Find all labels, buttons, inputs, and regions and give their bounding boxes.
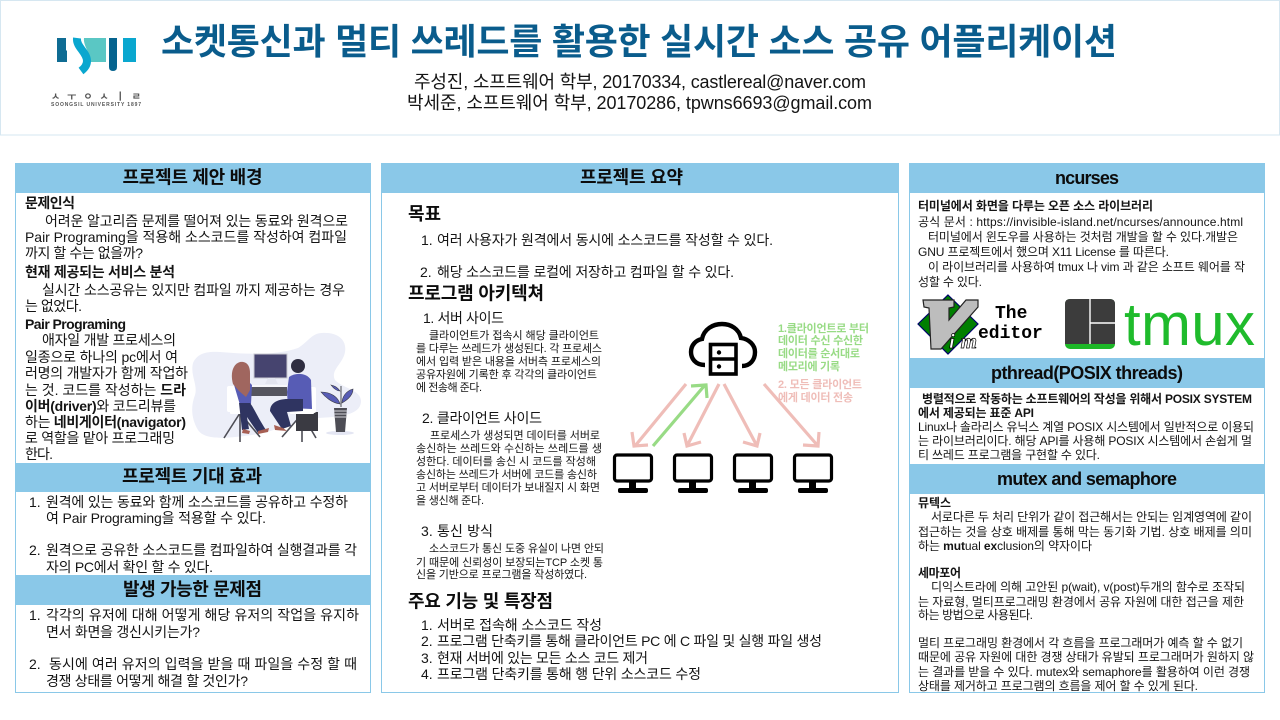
text block: possible problems: 면서 화면을 갱신시키는가? [46, 624, 200, 640]
section: program architecture [408, 284, 604, 581]
section: program architecture: 기 때문에 신뢰성이 보장되는TCP 소켓 통 [416, 556, 603, 569]
section: program architecture: 신을 기반으로 프로그램을 작성하였다. [416, 567, 587, 581]
text block: background: 어려운 알고리즘 문제를 떨어져 있는 동료와 원격으로 [45, 213, 348, 229]
section: key features [408, 592, 822, 682]
text block: semaphore: 는 자료형, 멀티프로그래밍 환경에서 공유 자원에 대한 접근을 제한 [918, 595, 1244, 609]
logo: vim: The [995, 304, 1027, 324]
section: goals: 여러 사용자가 원격에서 동시에 소스코드를 작성할 수 있다. [437, 232, 773, 248]
panel: right column [909, 163, 1265, 693]
heading: 프로젝트 제안 배경 [15, 163, 371, 193]
diagram: server and clients [614, 322, 869, 493]
text block: expected effects: 여 Pair Programing을 적용할 수 있다. [46, 510, 266, 526]
text block: semaphore: 멀티 프로그래밍 환경에서 각 흐름을 프로그래머가 예측 할 수 없기 [918, 636, 1243, 650]
logo: vim: editor [978, 324, 1043, 344]
logo: tmux: tmux [1124, 291, 1255, 358]
section: program architecture: 프로그램 아키텍쳐 [408, 284, 544, 304]
text block: possible problems: 각각의 유저에 대해 어떻게 해당 유저의 작업을 유지하 [46, 607, 359, 623]
illustration: pair programming [192, 333, 361, 442]
heading: mutex and semaphore [909, 464, 1265, 494]
callout: receive step: 메모리에 기록 [778, 359, 840, 373]
text block: ncurses: 터미널에서 화면을 다루는 오픈 소스 라이브러리 [918, 198, 1153, 213]
text block: background: 는 없었다. [25, 298, 82, 314]
callout: receive step: 데이터 수신 수신한 [778, 333, 863, 347]
icons: client monitors [614, 455, 832, 493]
section: key features: 주요 기능 및 특장점 [408, 592, 553, 612]
section: program architecture: 송신하는 쓰레드가 서버에 코드를 송신하 [416, 467, 597, 481]
text block: ncurses: 성할 수 있다. [918, 275, 982, 289]
heading: 프로젝트 기대 효과 [15, 463, 371, 492]
section: key features: 3. [421, 650, 433, 666]
text block: background: 까지 할 수는 없을까? [25, 245, 143, 261]
text block: background [25, 195, 348, 462]
heading: 프로젝트 요약 [381, 163, 899, 193]
section: program architecture: 1. 서버 사이드 [423, 310, 504, 326]
panel: project summary [381, 163, 899, 692]
text block: background: 하는 네비게이터(navigator) [25, 414, 186, 430]
text block: ncurses: 터미널에서 윈도우를 사용하는 것처럼 개발을 할 수 있다.개발은 [928, 230, 1238, 244]
text block: mutex: 하는 mutual exclusion의 약자이다 [918, 538, 1092, 553]
panel: left column [15, 163, 371, 692]
text block: semaphore: 세마포어 [918, 566, 961, 580]
logo: vim [918, 295, 1043, 354]
text block: pthread: 에서 제공되는 표준 API [918, 405, 1034, 420]
heading: 프로젝트 기대 효과: 프로젝트 기대 효과 [122, 466, 262, 486]
callout: send step: 2. 모든 클라이언트 [778, 378, 862, 391]
text block: semaphore: 는 결과를 받을 수 있다. mutex와 semaphore를 활용하여 이런 경쟁 [918, 665, 1250, 679]
section: goals: 목표 [408, 204, 441, 224]
text block: pthread: 병렬적으로 작동하는 소프트웨어의 작성을 위해서 POSIX SYSTEM [922, 392, 1252, 406]
text block: expected effects [29, 494, 357, 575]
section: goals [408, 204, 773, 280]
text block: semaphore: 디익스트라에 의해 고안된 p(wait), v(post)두개의 함수로 조작되 [931, 580, 1245, 594]
section: program architecture: 프로세스가 생성되면 데이터를 서버로 [430, 429, 600, 442]
text block: semaphore: 하는 방법으로 사용된다. [918, 608, 1033, 622]
heading: 프로젝트 제안 배경: 프로젝트 제안 배경 [122, 168, 262, 188]
arrows: data flow [632, 384, 819, 446]
text block: background: Pair Programing [25, 316, 126, 332]
callout: send step: 에게 데이터 전송 [778, 390, 853, 404]
text block: background: Pair Programing을 적용해 소스코드를 작성하여 컴파일 [25, 229, 347, 245]
text block: possible problems: 경쟁 상태를 어떻게 해결 할 것인가? [46, 673, 248, 689]
text block: ncurses: 이 라이브러리를 사용하여 tmux 나 vim 과 같은 소프트 웨어를 작 [928, 260, 1245, 274]
text block: background: 실시간 소스공유는 있지만 컴파일 까지 제공하는 경우 [42, 282, 345, 298]
text block: pthread: 는 라이브러리이다. 해당 API를 사용해 POSIX 시스템에서 손쉽게 멀 [918, 434, 1252, 448]
section: program architecture: 2. 클라이언트 사이드 [422, 410, 542, 426]
text block: background: 로 역할을 맡아 프로그래밍 [25, 430, 175, 446]
text block: pthread [918, 392, 1254, 462]
section: key features: 서버로 접속해 소스코드 작성 [437, 617, 602, 633]
section: program architecture: 클라이언트가 접속시 해당 클라이언트 [429, 328, 599, 342]
section: program architecture: 송신하는 쓰레드와 수신하는 쓰레드를 생 [416, 441, 602, 455]
icon: cloud server [691, 324, 755, 374]
text block: background: 현재 제공되는 서비스 분석 [25, 264, 175, 280]
authors [407, 72, 872, 113]
logo: Soongsil University [51, 38, 141, 108]
text block: possible problems: 동시에 여러 유저의 입력을 받을 때 파일을 수정 할 때 [49, 656, 357, 672]
text block: expected effects: 1. [29, 494, 41, 510]
heading: 발생 가능한 문제점: 발생 가능한 문제점 [123, 580, 262, 600]
section: program architecture: 3. 통신 방식 [421, 523, 493, 539]
text block: expected effects: 원격에 있는 동료와 함께 소스코드를 공유하고 수정하 [46, 494, 348, 510]
heading: 발생 가능한 문제점 [15, 575, 371, 605]
section: program architecture: 성한다. 데이터를 송신 시 코드를 작성해 [416, 454, 596, 468]
section: goals: 해당 소스코드를 로컬에 저장하고 컴파일 할 수 있다. [437, 264, 734, 280]
text block: ncurses: 공식 문서 : https://invisible-island.net/ncurses/announce.html [918, 215, 1243, 229]
text block: semaphore: 때문에 공유 자원에 대한 경쟁 상태가 유발되 프로그래머가 원하지 않 [918, 650, 1254, 664]
authors: 주성진, 소프트웨어 학부, 20170334, castlereal@naver.com [414, 72, 866, 92]
text block: background: 애자일 개발 프로세스의 [42, 332, 176, 348]
text block: ncurses [918, 198, 1245, 289]
title: 소켓통신과 멀티 쓰레드를 활용한 실시간 소스 공유 어플리케이션 [161, 21, 1117, 62]
text block: pthread: 티 쓰레드 프로그램을 구현할 수 있다. [918, 448, 1100, 462]
section: program architecture: 에서 입력 받은 내용을 서버측 프로세스의 [416, 355, 601, 368]
callout: receive step: 1.클라이언트로 부터 [778, 322, 869, 335]
text block: possible problems: 1. [29, 607, 41, 623]
text block: possible problems: 2. [29, 656, 41, 672]
text block: expected effects: 자의 PC에서 확인 할 수 있다. [46, 559, 213, 575]
text block: background: 이버(driver)와 코드리뷰를 [25, 398, 176, 414]
text block: expected effects: 원격으로 공유한 소스코드를 컴파일하여 실행결과를 각 [46, 542, 357, 558]
section: program architecture: 를 다루는 쓰레드가 생성된다. 각 프로세스 [416, 342, 602, 355]
text block: background: 일종으로 하나의 pc에서 여 [25, 349, 178, 365]
text block: semaphore [918, 566, 1254, 693]
logo: Soongsil University: ㅅㅜㅇㅅㅣㄹ [51, 91, 141, 103]
section: program architecture: 소스코드가 통신 도중 유실이 나면 안되 [429, 542, 604, 555]
text block: semaphore: 상태를 제거하고 프로그램의 흐름을 제어 할 수 있게 된다. [918, 679, 1198, 693]
text block: expected effects: 2. [29, 542, 41, 558]
section: key features: 2. [421, 633, 433, 649]
section: key features: 4. [421, 666, 433, 682]
section: key features: 프로그램 단축키를 통해 클라이언트 PC 에 C 파일 및 실행 파일 생성 [437, 633, 822, 649]
header band [0, 0, 1280, 135]
section: program architecture: 에 전송해 준다. [416, 380, 482, 394]
section: program architecture: 공유자원에 기록한 후 각각의 클라이언트 [416, 368, 597, 381]
text block: ncurses: GNU 프로젝트에서 했으며 X11 License 를 따른다. [918, 245, 1169, 259]
text block: background: 는 것. 코드를 작성하는 드라 [25, 382, 186, 398]
section: program architecture: 고 서버로부터 데이터가 보내질지 시 화면 [416, 481, 600, 494]
text block: background: 러명의 개발자가 함께 작업하 [25, 365, 188, 381]
text block: mutex: 뮤텍스 [918, 496, 951, 510]
callout: send step [778, 378, 862, 404]
heading: pthread [909, 358, 1265, 388]
heading: mutex and semaphore: mutex and semaphore [997, 469, 1177, 489]
text block: background: 한다. [25, 446, 53, 462]
section: goals: 1. [421, 232, 433, 248]
logo: vim: im [949, 329, 977, 353]
logo: Soongsil University: SOONGSIL UNIVERSITY 1897 [51, 102, 141, 108]
authors: 박세준, 소프트웨어 학부, 20170286, tpwns6693@gmail.com [407, 93, 872, 113]
callout: receive step: 데이터를 순서대로 [778, 346, 860, 360]
callout: receive step [778, 322, 869, 373]
text block: mutex: 서로다른 두 처리 단위가 같이 접근해서는 안되는 임계영역에 같이 [931, 510, 1252, 524]
heading: ncurses: ncurses [1055, 168, 1119, 188]
section: key features: 프로그램 단축키를 통해 행 단위 소스코드 수정 [437, 666, 701, 682]
logo: tmux [1065, 291, 1255, 358]
text block: mutex [918, 496, 1252, 553]
section: program architecture: 을 생신해 준다. [416, 493, 484, 507]
section: key features: 현재 서버에 있는 모든 소스 코드 제거 [437, 650, 648, 666]
section: key features: 1. [421, 617, 433, 633]
text block: mutex: 접근하는 것을 상호 배제를 통해 막는 동기화 기법. 상호 배제를 의미 [918, 525, 1252, 539]
text block: possible problems [29, 607, 359, 689]
section: goals: 2. [420, 264, 432, 280]
heading: ncurses [909, 163, 1265, 193]
text block: pthread: Linux나 솔라리스 유닉스 계열 POSIX 시스템에서 일반적으로 이용되 [918, 420, 1254, 434]
text block: background: 문제인식 [25, 195, 75, 211]
heading: pthread: pthread(POSIX threads) [991, 363, 1183, 383]
heading: 프로젝트 요약: 프로젝트 요약 [580, 168, 683, 188]
